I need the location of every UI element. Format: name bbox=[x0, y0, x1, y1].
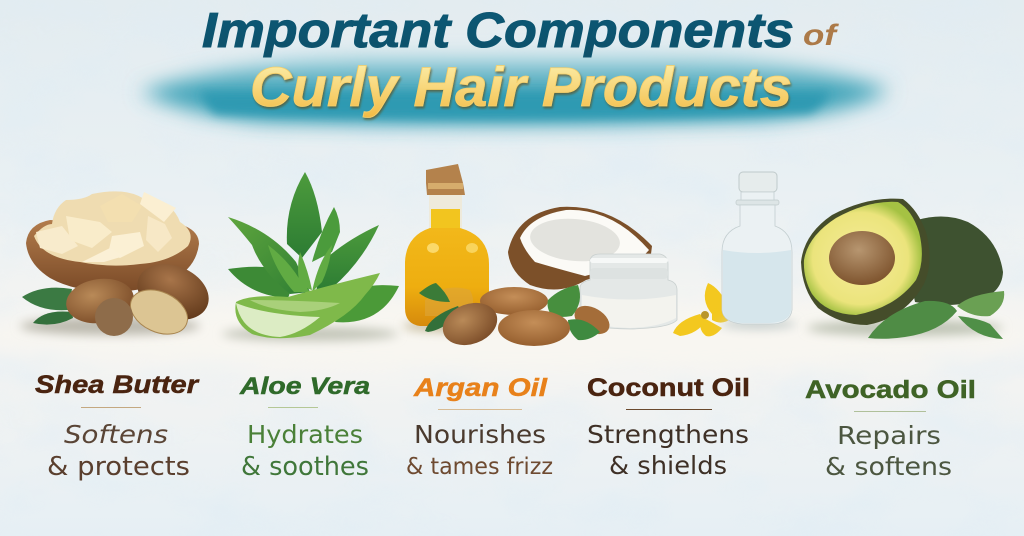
icon: avocado seed bbox=[829, 231, 895, 285]
label: avocado oil: & softens bbox=[825, 452, 952, 481]
title: Curly Hair Products bbox=[250, 55, 792, 118]
icon: glass neck bbox=[429, 195, 462, 229]
label: coconut oil: Coconut Oil bbox=[587, 374, 750, 402]
illustration: clear oil bottle bbox=[720, 172, 796, 329]
icon: shea butter chunks bbox=[34, 191, 191, 266]
illustration: coconut bbox=[508, 207, 652, 289]
illustration: avocado bbox=[801, 199, 1004, 339]
label: argan oil: Nourishes bbox=[414, 420, 546, 449]
label: argan oil: Argan Oil bbox=[413, 374, 548, 402]
illustration: aloe vera bbox=[222, 172, 399, 341]
icon: wooden bowl bbox=[26, 220, 199, 292]
illustration: cream jar bbox=[580, 254, 677, 329]
title: Important Components bbox=[202, 4, 794, 58]
label: aloe vera: Aloe Vera bbox=[239, 373, 370, 400]
illustration: shea butter bbox=[20, 191, 217, 343]
label: shea butter bbox=[35, 371, 199, 482]
icon: mint leaves bbox=[22, 288, 73, 325]
illustration: argan nuts and leaves bbox=[419, 283, 614, 352]
title bbox=[202, 4, 839, 118]
icon: whole avocado bbox=[910, 216, 1003, 305]
illustration: yellow flower bbox=[673, 283, 732, 336]
label: aloe vera bbox=[239, 373, 370, 482]
label: aloe vera: Hydrates bbox=[247, 420, 363, 449]
label: coconut oil bbox=[587, 374, 750, 480]
label: shea butter: & protects bbox=[47, 452, 190, 482]
label: coconut oil: Strengthens bbox=[587, 420, 749, 449]
label: argan oil bbox=[406, 374, 553, 480]
icon: sliced aloe leaf bbox=[235, 273, 380, 338]
label: argan oil: & tames frizz bbox=[406, 454, 553, 480]
icon: shea nuts bbox=[63, 254, 217, 343]
label: shea butter: Shea Butter bbox=[35, 371, 199, 399]
icon: oil body bbox=[405, 228, 489, 326]
icon: mint leaves bbox=[868, 301, 957, 339]
label: shea butter: Softens bbox=[64, 420, 168, 449]
label: avocado oil: Avocado Oil bbox=[805, 376, 976, 404]
label: coconut oil: & shields bbox=[609, 451, 727, 480]
label: avocado oil bbox=[805, 376, 976, 481]
label: avocado oil: Repairs bbox=[837, 421, 941, 450]
title: of bbox=[803, 19, 839, 52]
illustration: argan oil bottle bbox=[403, 164, 491, 332]
label: aloe vera: & soothes bbox=[241, 452, 369, 482]
title banner bbox=[140, 58, 890, 125]
icon: cork bbox=[426, 164, 465, 195]
icon: avocado half bbox=[801, 199, 930, 325]
